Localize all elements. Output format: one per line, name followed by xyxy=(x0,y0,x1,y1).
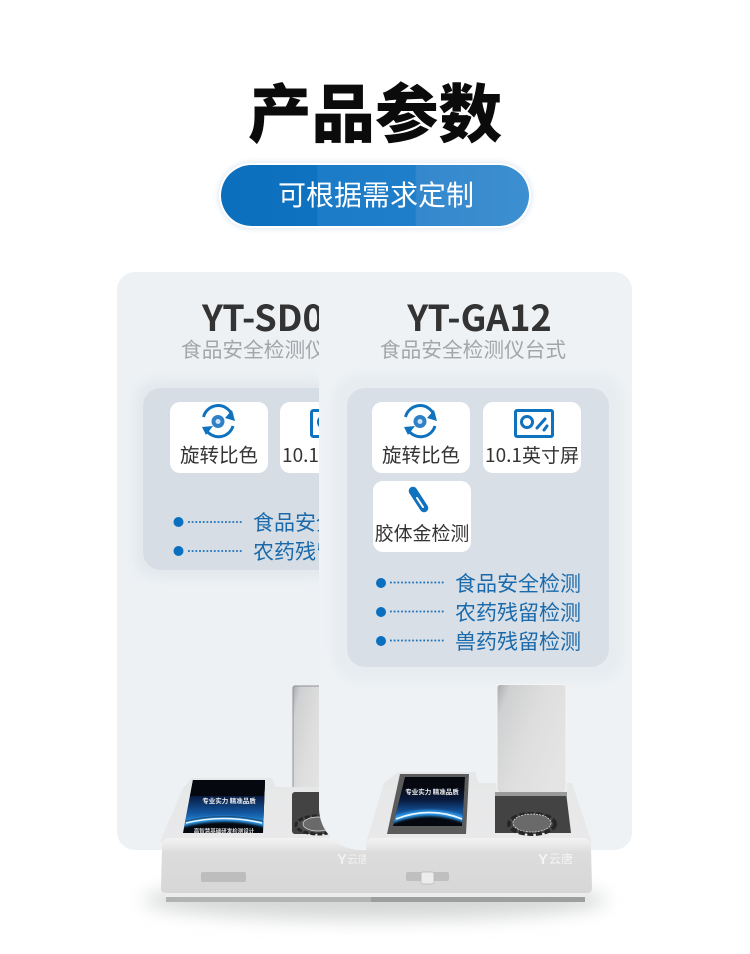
device: right instrument xyxy=(366,684,592,902)
feature list: right: 农药残留检测 xyxy=(455,597,581,627)
feature list: left xyxy=(174,507,379,566)
subtitle: right product: 食品安全检测仪台式 xyxy=(380,333,566,363)
feature card: screen (left) xyxy=(280,402,378,473)
brand logo: 云唐 xyxy=(549,850,573,867)
feature card: colloidal gold xyxy=(373,481,471,552)
device: left instrument xyxy=(160,686,380,902)
device: left instrument: Y xyxy=(337,851,347,868)
feature card: rotary colorimetry xyxy=(372,402,470,473)
panel: YT-GA12 card xyxy=(319,304,609,850)
device: left instrument: 高智慧基础研发检测设计 xyxy=(194,827,255,835)
feature list: right: 兽药残留检测 xyxy=(455,626,581,656)
brand logo xyxy=(538,850,573,868)
lid xyxy=(497,684,566,792)
pill badge: customizable: 可根据需求定制 xyxy=(278,174,474,214)
brand logo: Y xyxy=(538,851,548,868)
sample well xyxy=(495,792,571,833)
feature card: screen (left): 10.1英寸屏 xyxy=(282,441,376,468)
subtitle: left product: 食品安全检测仪台式 xyxy=(181,333,367,363)
feature list: right xyxy=(376,568,581,656)
feature card: colloidal gold: 胶体金检测 xyxy=(375,519,469,546)
panel: left feature box xyxy=(143,388,403,570)
icon: rotating gear xyxy=(404,406,437,437)
feature list: left: 食品安全检测 xyxy=(253,507,379,537)
panel: YT-SD01 card xyxy=(117,272,632,850)
icon: test strip clip xyxy=(413,491,424,508)
model name: YT-SD: YT-SD01 xyxy=(201,290,345,342)
floor shadow xyxy=(143,880,607,920)
feature card: 10.1 inch screen xyxy=(483,402,581,473)
front face xyxy=(366,838,592,893)
feature card: rotary colorimetry (left) xyxy=(170,402,268,473)
device: left instrument: 云唐 xyxy=(347,851,369,867)
model name: YT-GA12: YT-GA12 xyxy=(406,290,552,342)
feature list: left: 农药残留检测 xyxy=(253,536,379,566)
icon: screen xyxy=(516,410,552,436)
title: 产品参数 xyxy=(248,64,502,156)
handle latch xyxy=(406,872,449,884)
feature card: rotary colorimetry (left): 旋转比色 xyxy=(180,439,258,468)
touch screen xyxy=(387,774,469,834)
panel: right feature box xyxy=(347,388,609,667)
feature card: rotary colorimetry: 旋转比色 xyxy=(382,439,460,468)
device: left instrument: 专业实力 精准品质 xyxy=(202,795,256,805)
touch screen: 专业实力 精准品质 xyxy=(405,786,459,796)
feature list: right: 食品安全检测 xyxy=(455,568,581,598)
pill badge: customizable xyxy=(217,161,533,230)
feature card: 10.1 inch screen: 10.1英寸屏 xyxy=(485,441,579,468)
